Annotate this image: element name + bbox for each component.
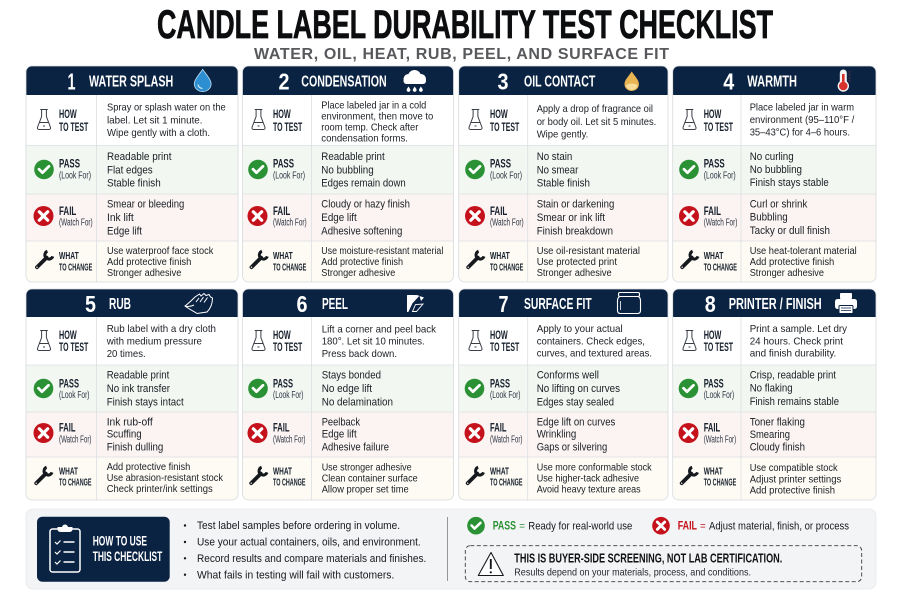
row: fail: Edge lift on curves <box>537 416 615 428</box>
row: what to change: Use waterproof face stock <box>107 246 214 257</box>
row: fail: FAIL <box>490 423 506 435</box>
row: pass: Crisp, readable print <box>750 370 836 382</box>
row: fail: FAIL <box>704 423 720 435</box>
row: what to change: Use stronger adhesive <box>322 462 412 473</box>
row: what to change: TO CHANGE <box>59 478 92 489</box>
row: how to test: TO TEST <box>704 122 733 134</box>
row: what to change: Adjust printer settings <box>750 474 841 485</box>
row: fail: (Watch For) <box>273 217 307 228</box>
row: how to test: Press back down. <box>322 349 397 360</box>
row: what to change: TO CHANGE <box>490 262 523 273</box>
row: how to test: condensation forms. <box>321 134 408 145</box>
row: pass: (Look For) <box>273 170 305 181</box>
row: what to change: Stronger adhesive <box>107 268 182 279</box>
row: pass: No delamination <box>322 396 393 408</box>
row: pass: No bubbling <box>750 164 802 176</box>
row: how to test: 24 hours. Check print <box>750 336 843 347</box>
row: fail: Cloudy finish <box>750 441 805 453</box>
row: fail: Cloudy or hazy finish <box>321 199 410 211</box>
callout: how to use this checklist: HOW TO USE <box>93 532 147 548</box>
row: what to change: Use heat-tolerant material <box>750 246 857 257</box>
row: pass <box>242 146 454 194</box>
header: peel <box>242 289 454 365</box>
header: water splash: WATER SPLASH <box>89 74 173 91</box>
row: what to change: TO CHANGE <box>704 478 736 489</box>
row: fail <box>673 412 876 457</box>
row: fail: Bubbling <box>750 212 788 224</box>
row: pass: No stain <box>537 151 572 163</box>
row: how to test: Spray or splash water on the <box>107 103 226 114</box>
row: how to test <box>252 101 434 145</box>
row: pass: No flaking <box>750 383 793 395</box>
panel: card 4 warmth <box>673 66 876 282</box>
row: what to change: Clean container surface <box>322 474 418 485</box>
row: fail: Edge lift <box>107 225 142 237</box>
legend: fail: = <box>700 520 706 532</box>
panel: footer <box>26 509 876 589</box>
row: how to test: environment, then move to <box>321 112 434 123</box>
row: fail <box>26 194 238 241</box>
row: pass: Readable print <box>107 370 169 382</box>
header: surface fit: SURFACE FIT <box>524 296 592 313</box>
row: fail: Stain or darkening <box>537 199 614 211</box>
row: how to test: Wipe gently. <box>537 130 588 141</box>
list: usage tips <box>184 520 426 581</box>
row: how to test: or body oil. Let sit 5 minutes. <box>537 117 656 128</box>
row: pass: No smear <box>537 164 579 176</box>
row: what to change: Avoid heavy texture areas <box>537 485 641 496</box>
row: what to change: WHAT <box>490 466 509 478</box>
row: pass: PASS <box>704 158 725 170</box>
row: how to test <box>469 104 656 141</box>
row: what to change: Use oil-resistant material <box>537 246 640 257</box>
icon: rubbing hand <box>185 294 212 314</box>
row: what to change: WHAT <box>59 250 79 262</box>
row: how to test: HOW <box>490 109 508 121</box>
row: pass: (Look For) <box>704 170 736 181</box>
row: fail: (Watch For) <box>490 217 524 228</box>
row: what to change: Add protective finish <box>107 257 191 268</box>
row: fail: Scuffing <box>107 429 142 441</box>
row: fail <box>242 412 454 457</box>
row: fail: Finish dulling <box>107 441 163 453</box>
row: how to test: TO TEST <box>59 342 88 354</box>
row: how to test: label. Let sit 1 minute. <box>107 115 202 126</box>
row: fail <box>459 412 668 457</box>
row: fail: Smearing <box>750 429 790 441</box>
header: condensation: 2 <box>278 68 290 94</box>
row: how to test: TO TEST <box>704 342 733 354</box>
panel: card 1 water splash <box>26 66 238 282</box>
row: how to test: HOW <box>59 109 77 121</box>
row: pass: Stable finish <box>537 177 590 189</box>
row: how to test: Rub label with a dry cloth <box>107 324 216 335</box>
row: pass: PASS <box>490 378 510 390</box>
row: what to change <box>459 241 668 282</box>
row: fail: Edge lift <box>321 212 357 224</box>
row: how to test: Place labeled jar in warm <box>750 103 854 114</box>
row: pass: Finish remains stable <box>750 396 839 408</box>
icon: oil drop <box>624 72 639 91</box>
row: fail: FAIL <box>273 206 290 218</box>
row: pass: No lifting on curves <box>537 383 620 395</box>
row: what to change: TO CHANGE <box>59 262 92 273</box>
row: fail: (Watch For) <box>490 434 522 445</box>
icon: water drop <box>194 69 211 92</box>
row: fail: Curl or shrink <box>750 198 808 210</box>
legend: fail: FAIL <box>678 520 697 532</box>
header: peel: PEEL <box>322 296 348 313</box>
row: fail: (Watch For) <box>704 217 737 228</box>
row: pass: No bubbling <box>321 164 374 176</box>
row: what to change <box>242 241 454 282</box>
row: what to change: Add protective finish <box>107 462 190 473</box>
row: how to test: TO TEST <box>273 342 302 354</box>
row: how to test: 180°. Let sit 10 minutes. <box>322 336 425 347</box>
header: rub: RUB <box>109 296 131 313</box>
row: fail: Ink lift <box>107 212 134 224</box>
row: pass: No curling <box>750 151 794 163</box>
list: usage tips: What fails in testing will fail with customers. <box>197 569 394 581</box>
row: how to test: Wipe gently with a cloth. <box>107 128 210 139</box>
panel: card 7 surface fit <box>459 289 668 500</box>
row: pass: No ink transfer <box>107 383 170 395</box>
row: what to change: WHAT <box>273 466 292 478</box>
row: pass: PASS <box>490 158 511 170</box>
row: fail: FAIL <box>59 423 76 435</box>
row: how to test <box>37 324 216 360</box>
row: fail: Tacky or dull finish <box>750 225 830 237</box>
row: how to test: HOW <box>704 109 721 121</box>
callout: disclaimer: THIS IS BUYER-SIDE SCREENING, NOT LAB CERTIFICATION. <box>514 552 782 566</box>
row: pass: Conforms well <box>537 370 599 382</box>
header: peel: 6 <box>296 291 308 317</box>
header: condensation <box>242 66 454 146</box>
row: how to test: HOW <box>273 109 291 121</box>
row: pass <box>459 365 668 412</box>
row: what to change: Use more conformable stock <box>537 462 653 473</box>
list: usage tips: Use your actual containers, oils, and environment. <box>197 536 421 548</box>
row: pass <box>26 365 238 412</box>
row: how to test: environment (95–110°F / <box>750 115 854 126</box>
legend: pass: = <box>519 520 525 532</box>
row: how to test: TO TEST <box>273 122 302 134</box>
row: what to change <box>26 241 238 282</box>
panel: card 5 rub <box>26 289 238 500</box>
row: fail <box>673 194 876 241</box>
row: how to test: curves, and textured areas. <box>537 349 652 360</box>
row: how to test: room temp. Check after <box>321 123 419 134</box>
row: how to test: TO TEST <box>490 342 519 354</box>
row: how to test: with medium pressure <box>106 336 202 347</box>
row: pass: (Look For) <box>490 170 522 181</box>
callout: how to use this checklist <box>37 517 170 582</box>
row: pass: No edge lift <box>322 383 372 395</box>
header: water splash <box>26 66 238 146</box>
icon: printer <box>835 293 857 314</box>
header: rub: 5 <box>85 291 96 317</box>
icon: jar <box>618 292 640 314</box>
row: fail: Adhesive softening <box>321 225 402 237</box>
row: pass <box>26 146 238 194</box>
row: what to change: WHAT <box>704 466 723 478</box>
row: pass: PASS <box>273 378 293 390</box>
row: pass: PASS <box>59 378 79 390</box>
row: how to test <box>252 324 437 360</box>
header: oil contact: OIL CONTACT <box>524 74 596 91</box>
row: pass: PASS <box>704 378 724 390</box>
row: how to test: Apply a drop of fragrance oil <box>537 104 653 115</box>
row: fail <box>26 412 238 457</box>
row: how to test <box>683 103 854 139</box>
icon: thermometer <box>838 70 850 92</box>
icon: warning triangle <box>478 552 503 576</box>
row: pass: Readable print <box>107 151 172 163</box>
row: fail: (Watch For) <box>273 434 306 445</box>
header: warmth: 4 <box>723 68 734 94</box>
row: how to test <box>683 324 848 360</box>
row: how to test: HOW <box>59 330 77 342</box>
row: what to change: WHAT <box>273 250 293 262</box>
header: printer finish: PRINTER / FINISH <box>729 296 822 313</box>
header: condensation: CONDENSATION <box>301 74 387 91</box>
row: what to change: Add protective finish <box>750 257 834 268</box>
row: fail: (Watch For) <box>704 434 736 445</box>
legend: pass: Ready for real-world use <box>528 520 632 532</box>
row: what to change <box>673 241 876 282</box>
row: what to change: Allow proper set time <box>322 485 409 496</box>
row: fail: (Watch For) <box>59 217 93 228</box>
row: what to change: Add protective finish <box>321 257 403 268</box>
row: what to change: WHAT <box>490 250 510 262</box>
row: what to change: TO CHANGE <box>273 478 306 489</box>
row: how to test <box>469 324 652 360</box>
row: pass: (Look For) <box>704 390 734 401</box>
row: fail: Gaps or silvering <box>537 441 607 453</box>
row: pass: Flat edges <box>107 164 153 176</box>
header: oil contact <box>459 66 668 146</box>
row: fail: FAIL <box>59 206 76 218</box>
legend: fail: Adjust material, finish, or process <box>709 520 849 532</box>
row: pass: Stable finish <box>107 177 161 189</box>
row: what to change: Use protected print <box>537 257 617 268</box>
row: fail: FAIL <box>704 206 721 218</box>
row: pass: (Look For) <box>490 390 520 401</box>
subtitle: WATER, OIL, HEAT, RUB, PEEL, AND SURFACE FIT <box>254 46 669 63</box>
row: what to change: WHAT <box>704 250 724 262</box>
row: pass: PASS <box>273 158 294 170</box>
row: pass: Edges stay sealed <box>537 396 614 408</box>
header: rub <box>26 289 238 365</box>
row: fail: Adhesive failure <box>322 441 389 453</box>
row: what to change: Stronger adhesive <box>321 268 396 279</box>
row: fail: Peelback <box>322 416 361 428</box>
header: warmth <box>673 66 876 146</box>
row: fail <box>242 194 454 241</box>
header: printer finish: 8 <box>705 291 716 317</box>
row: how to test: 35–43°C) for 4–6 hours. <box>750 128 850 139</box>
row: fail: Smear or ink lift <box>537 212 605 224</box>
row: fail <box>459 194 668 241</box>
list: usage tips: Record results and compare materials and finishes. <box>197 553 426 565</box>
legend: fail <box>652 517 849 534</box>
header: water splash: 1 <box>68 68 76 94</box>
row: pass: (Look For) <box>59 170 91 181</box>
row: what to change: Add protective finish <box>750 486 835 497</box>
header: printer finish <box>673 289 876 365</box>
row: how to test <box>37 103 226 139</box>
header: warmth: WARMTH <box>747 74 797 91</box>
icon: clipboard <box>50 525 80 572</box>
header: surface fit <box>459 289 668 365</box>
legend: pass <box>467 517 632 535</box>
row: pass: (Look For) <box>59 390 90 401</box>
row: how to test: TO TEST <box>490 122 519 134</box>
callout: disclaimer: Results depend on your materials, process, and conditions. <box>514 566 751 578</box>
row: how to test: TO TEST <box>59 122 88 134</box>
row: fail: Ink rub-off <box>107 416 153 428</box>
row: pass: Finish stays stable <box>750 177 829 189</box>
row: fail: Smear or bleeding <box>107 199 184 211</box>
row: pass: (Look For) <box>273 390 304 401</box>
callout: how to use this checklist: THIS CHECKLIST <box>93 548 163 564</box>
icon: peeling label <box>408 296 424 312</box>
row: pass: Stays bonded <box>322 370 381 382</box>
row: pass: Edges remain down <box>321 177 406 189</box>
row: pass: Readable print <box>321 151 385 163</box>
row: fail: Finish breakdown <box>537 225 613 237</box>
header: surface fit: 7 <box>498 291 508 317</box>
row: what to change: Check printer/ink settings <box>107 484 213 495</box>
row: how to test: HOW <box>490 330 508 342</box>
row: what to change <box>242 457 454 500</box>
row: what to change: WHAT <box>59 466 78 478</box>
panel: card 3 oil contact <box>459 66 668 282</box>
row: fail: FAIL <box>273 423 290 435</box>
row: fail: Wrinkling <box>537 429 576 441</box>
legend: pass: PASS <box>493 520 516 532</box>
row: what to change <box>673 457 876 500</box>
row: how to test: Print a sample. Let dry <box>750 324 848 335</box>
row: fail: Toner flaking <box>750 416 805 428</box>
panel: card 8 printer finish <box>673 289 876 500</box>
row: what to change: Use higher-tack adhesive <box>537 474 639 485</box>
row: what to change: Stronger adhesive <box>537 268 612 279</box>
icon: rain cloud <box>404 70 426 92</box>
row: fail: (Watch For) <box>59 434 92 445</box>
header: oil contact: 3 <box>498 68 508 94</box>
row: what to change: Use compatible stock <box>750 463 839 474</box>
row: pass <box>673 146 876 194</box>
callout: disclaimer <box>465 546 862 582</box>
row: how to test: containers. Check edges, <box>537 336 645 347</box>
row: what to change: Use moisture-resistant material <box>321 246 443 257</box>
row: how to test: Apply to your actual <box>537 324 623 335</box>
row: pass <box>673 365 876 412</box>
row: pass: Finish stays intact <box>107 396 184 408</box>
row: how to test: HOW <box>273 330 291 342</box>
panel: card 6 peel <box>242 289 454 500</box>
row: what to change: TO CHANGE <box>273 262 306 273</box>
row: what to change <box>459 457 668 500</box>
list: usage tips: Test label samples before ordering in volume. <box>197 520 400 532</box>
row: fail: FAIL <box>490 206 507 218</box>
row: how to test: 20 times. <box>107 349 146 360</box>
panel: card 2 condensation <box>242 66 454 282</box>
row: pass <box>459 146 668 194</box>
row: pass <box>242 365 454 412</box>
row: what to change: TO CHANGE <box>490 478 523 489</box>
row: pass: PASS <box>59 158 80 170</box>
row: what to change: Stronger adhesive <box>750 268 824 279</box>
row: what to change: TO CHANGE <box>704 262 737 273</box>
row: how to test: HOW <box>704 330 721 342</box>
row: how to test: and finish durability. <box>750 349 836 360</box>
row: what to change: Use abrasion-resistant stock <box>107 473 224 484</box>
row: how to test: Lift a corner and peel back <box>322 324 437 335</box>
row: how to test: Place labeled jar in a cold <box>321 101 427 112</box>
row: fail: Edge lift <box>322 429 357 441</box>
row: what to change <box>26 457 238 500</box>
